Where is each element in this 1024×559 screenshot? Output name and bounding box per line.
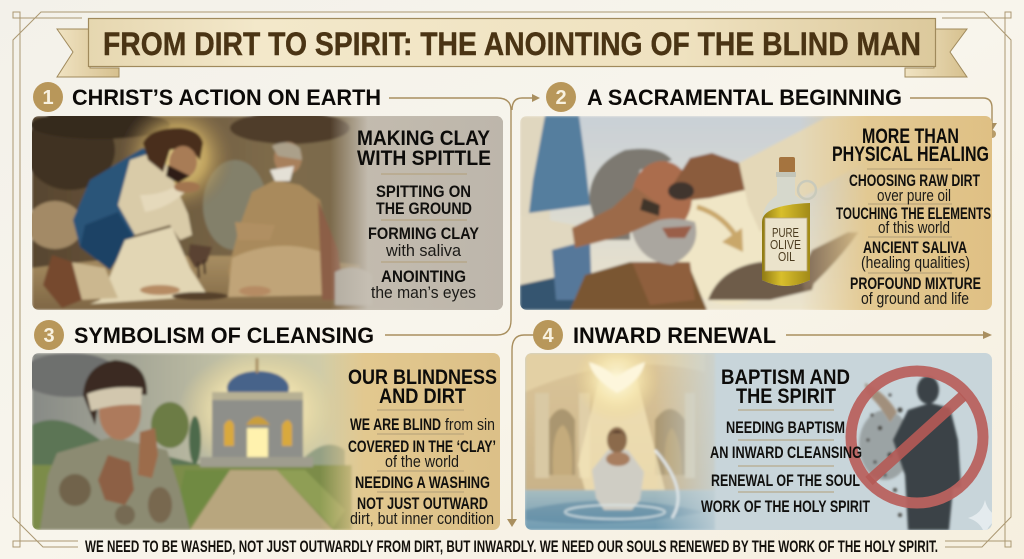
text block: making clay with spittle: THE GROUND (376, 200, 472, 218)
text block: more than physical healing: PROFOUND MIXTURE (850, 275, 981, 293)
text block: making clay with spittle: MAKING CLAY (357, 127, 490, 150)
text block: making clay with spittle: ANOINTING (381, 268, 466, 286)
text block: more than physical healing: (healing qualities) (861, 254, 970, 272)
illustration: baptism and prohibited dirt figure (525, 353, 992, 530)
arrow: step 2 downward (910, 98, 997, 138)
text block: our blindness and dirt (348, 366, 497, 528)
icon: prohibition sign (851, 371, 983, 503)
panel 3: symbolism of cleansing (20, 350, 500, 530)
text block: our blindness and dirt: AND DIRT (379, 385, 466, 408)
text block: our blindness and dirt: of the world (385, 453, 459, 471)
panel 2: sacramental beginning (520, 116, 992, 310)
heading 1: 1 (42, 87, 54, 109)
heading 1: CHRIST’S ACTION ON EARTH (72, 85, 381, 110)
text block: baptism and the spirit: BAPTISM AND (721, 366, 850, 389)
text block: more than physical healing: ANCIENT SALIVA (863, 239, 967, 257)
text block: our blindness and dirt: COVERED IN THE ‘CLAY’ (348, 438, 496, 456)
text block: more than physical healing: of ground and life (861, 290, 969, 308)
panel 4: inward renewal (525, 353, 992, 530)
title: FROM DIRT TO SPIRIT: THE ANOINTING OF THE BLIND MAN (103, 26, 921, 62)
text block: making clay with spittle: FORMING CLAY (368, 225, 479, 243)
arrow: step 1 to step 2 (385, 94, 540, 335)
heading 3: 3 (43, 325, 55, 347)
icon: olive oil bottle (762, 157, 816, 286)
bottle label: OIL (778, 250, 795, 264)
heading 3: SYMBOLISM OF CLEANSING (74, 323, 374, 348)
text block: baptism and the spirit: WORK OF THE HOLY SPIRIT (701, 498, 870, 516)
arrow: step 4 (507, 331, 992, 527)
panel 1: Christ's action (25, 99, 503, 310)
text block: more than physical healing: of this world (878, 219, 950, 237)
text block: more than physical healing (832, 125, 991, 308)
bottle label: OLIVE (770, 238, 801, 252)
text block: making clay with spittle: SPITTING ON (376, 183, 471, 201)
heading 4: INWARD RENEWAL (573, 323, 776, 348)
heading 2: A SACRAMENTAL BEGINNING (587, 85, 902, 110)
text block: our blindness and dirt: dirt, but inner condition (350, 510, 494, 528)
bottle label (770, 228, 801, 261)
text block: our blindness and dirt: OUR BLINDNESS (348, 366, 497, 389)
bottle label: PURE (772, 226, 799, 240)
text block: our blindness and dirt: from sin (445, 416, 495, 434)
illustration: dissolving figure (859, 376, 961, 530)
text block: more than physical healing: over pure oil (877, 187, 951, 205)
text block: baptism and the spirit: RENEWAL OF THE SOUL (711, 472, 860, 490)
text block: more than physical healing: CHOOSING RAW DIRT (849, 172, 980, 190)
text block: our blindness and dirt: WE ARE BLIND (350, 416, 441, 434)
text block: our blindness and dirt: NOT JUST OUTWARD (357, 495, 488, 513)
title banner (57, 18, 967, 77)
illustration: anointing the eyes and oil bottle (520, 116, 992, 310)
text block: baptism and the spirit: NEEDING BAPTISM (726, 419, 845, 437)
illustration: blindfolded man and temple (20, 350, 500, 530)
text block: more than physical healing: MORE THAN (862, 125, 959, 148)
text block: making clay with spittle (357, 127, 491, 302)
heading 2: 2 (555, 87, 567, 109)
text block: baptism and the spirit: THE SPIRIT (736, 385, 836, 408)
text block: baptism and the spirit: AN INWARD CLEANSING (710, 444, 862, 462)
heading 4: 4 (542, 325, 554, 347)
text block: baptism and the spirit (701, 366, 870, 516)
icon: sparkle (968, 500, 992, 530)
illustration: Christ and blind man (25, 99, 503, 310)
text block: our blindness and dirt: NEEDING A WASHING (355, 474, 490, 492)
text block: making clay with spittle: WITH SPITTLE (357, 147, 491, 170)
text block: making clay with spittle: the man’s eyes (371, 284, 476, 302)
heading 4 (533, 320, 776, 350)
text block: making clay with spittle: with saliva (385, 242, 462, 260)
